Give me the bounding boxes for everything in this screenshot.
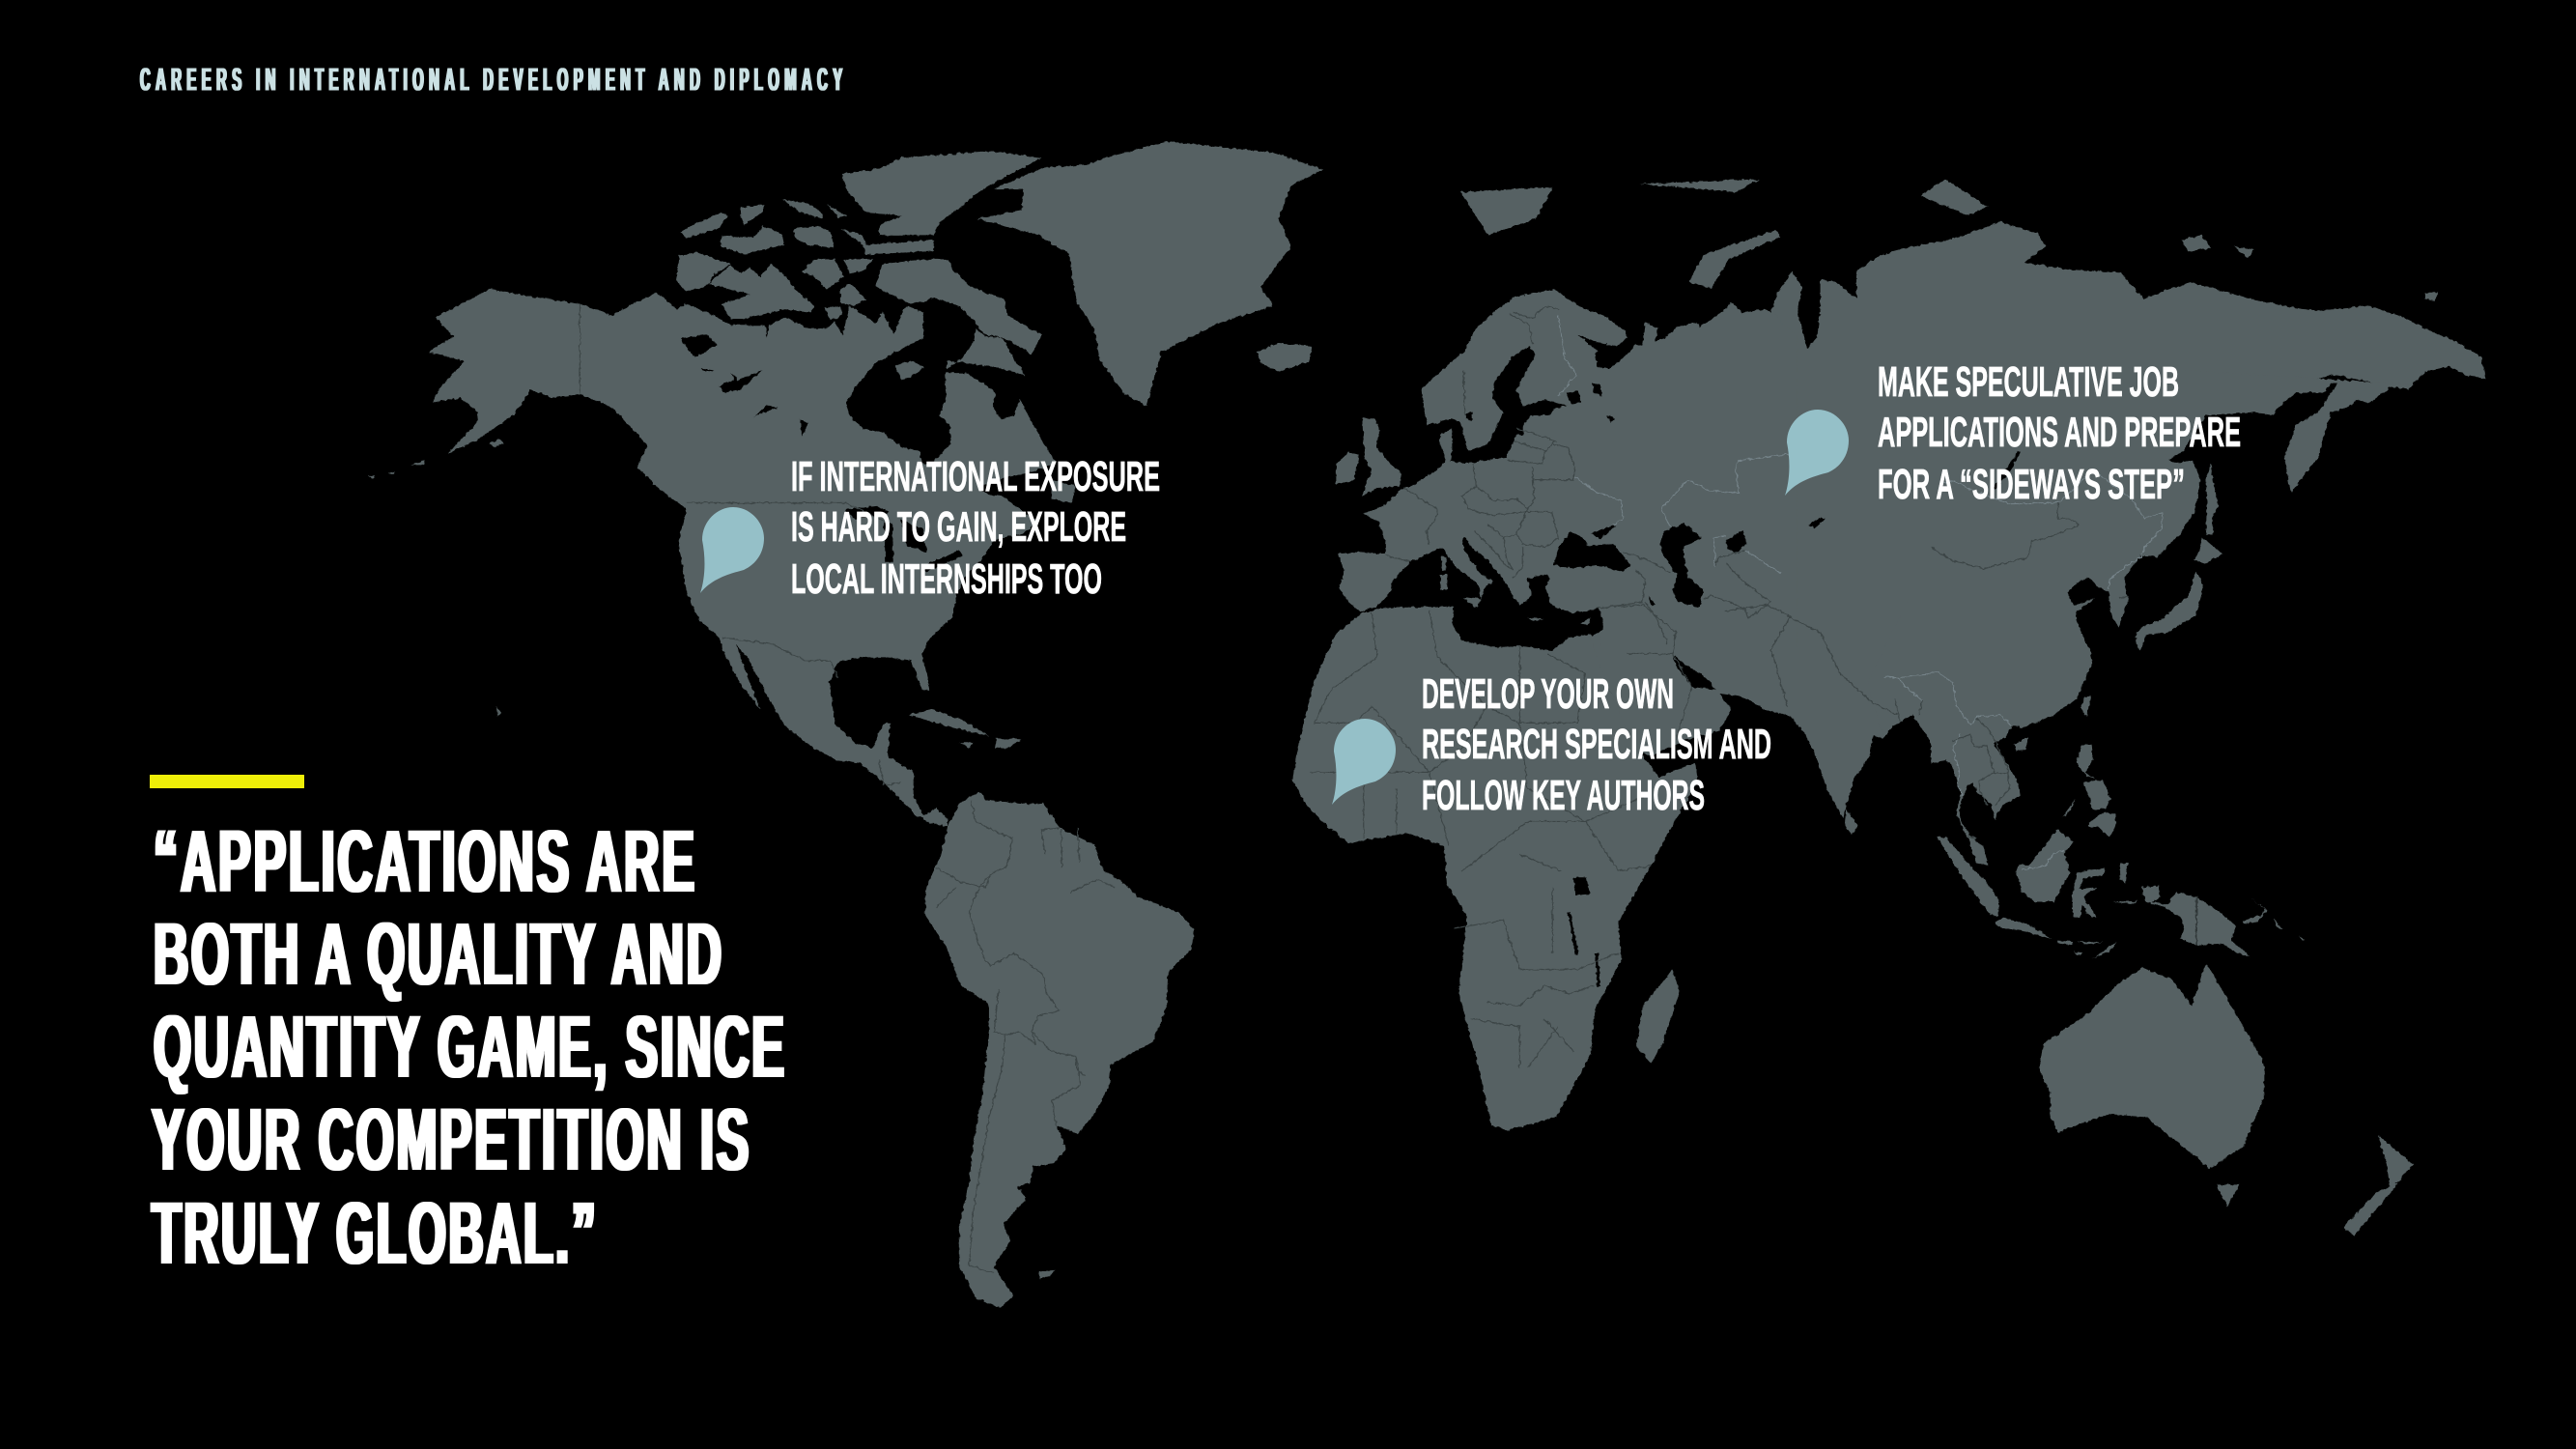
callout: speculative applications: MAKE SPECULATIVE JOB [1878, 358, 2179, 406]
pull quote: TRULY GLOBAL.” [152, 1183, 596, 1283]
map: European borders [1384, 306, 1770, 644]
pull quote: YOUR COMPETITION IS [152, 1090, 749, 1189]
map: Southeast Asian borders [1883, 671, 2064, 869]
pull quote [152, 811, 784, 1283]
icon: map pin, Russia [1785, 410, 1849, 496]
icon: map pin, North America [700, 507, 764, 593]
map: Caribbean and Pacific islands [368, 439, 1076, 750]
map: Falkland Islands [1038, 1270, 1055, 1278]
map: East and Southeast Asia [1809, 360, 2415, 867]
map: Black Sea, Caspian, Aral and lakes [1466, 384, 1746, 607]
callout: speculative applications [1878, 358, 2241, 508]
map: Iceland [1257, 343, 1313, 371]
map: British Isles [1336, 418, 1402, 496]
header label: CAREERS IN INTERNATIONAL DEVELOPMENT AND DIPLOMACY [140, 63, 842, 98]
map: Europe [1336, 290, 1797, 647]
map: Sri Lanka [1845, 810, 1858, 835]
callout: local internships [791, 453, 1160, 603]
map: Canadian Arctic Archipelago [676, 152, 1041, 380]
callout: research specialism: RESEARCH SPECIALISM AND [1422, 721, 1771, 768]
map: Southeast Asian islands and borders [1883, 671, 2306, 958]
callout: speculative applications: APPLICATIONS AND PREPARE [1878, 409, 2241, 456]
callout: speculative applications: FOR A “SIDEWAYS STEP” [1878, 461, 2185, 508]
map: Arctic Ocean islands [1460, 179, 2438, 300]
callout: research specialism: DEVELOP YOUR OWN [1422, 670, 1674, 718]
map: Tasmania [2217, 1184, 2239, 1206]
pull quote: QUANTITY GAME, SINCE [154, 997, 784, 1096]
map: Australia [2039, 963, 2264, 1168]
world map [368, 141, 2485, 1308]
map: Mediterranean islands [1440, 557, 1591, 625]
map: South America [925, 792, 1195, 1308]
callout: research specialism [1422, 670, 1771, 819]
map: Japan and Sakhalin [2135, 464, 2223, 650]
map: New Zealand [2342, 1135, 2414, 1236]
map: Africa [1293, 607, 1697, 1130]
map: North America mainland [429, 289, 1057, 827]
map: Russia, Central and South Asia, Arabia [1590, 222, 2485, 818]
pull quote: BOTH A QUALITY AND [154, 904, 722, 1004]
pull quote: “APPLICATIONS ARE [154, 811, 694, 911]
map: Greenland [977, 141, 1322, 406]
map: Russian, Mongolian and Chinese borders [1932, 502, 2128, 599]
callout: research specialism: FOLLOW KEY AUTHORS [1422, 772, 1705, 819]
callout: local internships: IS HARD TO GAIN, EXPLORE [791, 503, 1126, 551]
map: lakes of North America and Africa [681, 335, 1600, 986]
map: country borders [580, 304, 1898, 1068]
map: Lake Baikal and Balkhash [1809, 451, 2021, 528]
yellow accent bar [150, 775, 304, 788]
map: South American borders [937, 800, 1114, 1273]
callout: local internships: LOCAL INTERNSHIPS TOO [791, 555, 1102, 603]
map: Madagascar [1636, 970, 1679, 1063]
icon: map pin, West Africa [1332, 719, 1396, 805]
callout: local internships: IF INTERNATIONAL EXPOSURE [791, 453, 1160, 500]
